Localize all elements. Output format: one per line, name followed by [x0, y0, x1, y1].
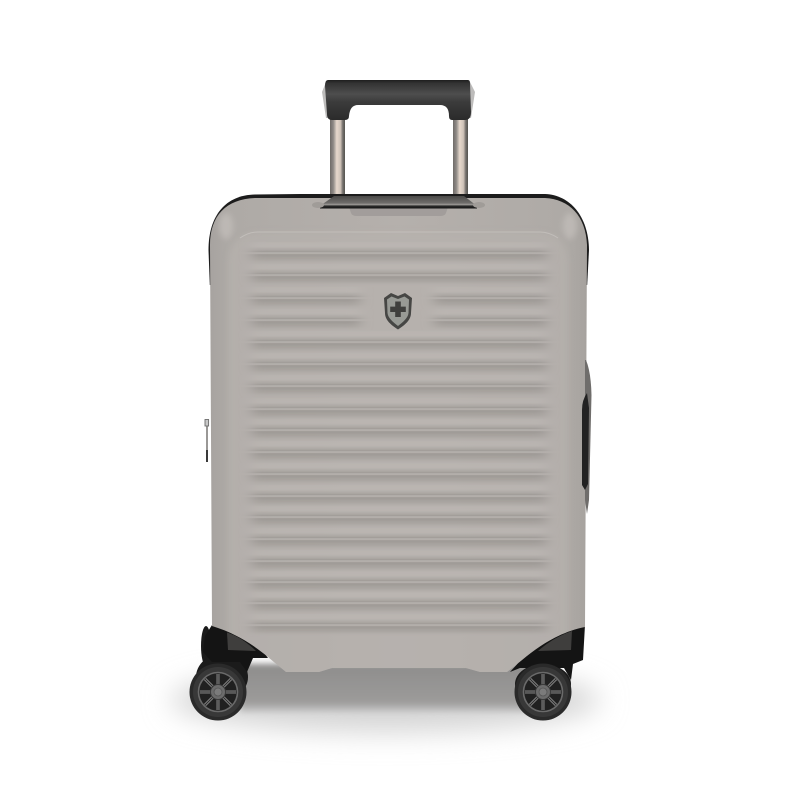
panel top highlight — [240, 232, 558, 238]
horizontal ridges — [252, 242, 546, 636]
shield face — [387, 296, 409, 326]
rear black shell rim — [208, 194, 589, 285]
suitcase illustration — [168, 80, 602, 744]
left wheel housing — [203, 625, 268, 672]
right handle mount — [473, 202, 485, 208]
right front wheel — [514, 664, 572, 720]
handle recess — [349, 207, 448, 216]
main shell — [210, 198, 587, 672]
soft ground shadow — [170, 668, 600, 732]
middle left tyre — [196, 654, 248, 700]
top carry handle — [312, 196, 485, 216]
corner highlights — [219, 213, 577, 239]
right wedge gloss on wheel housing — [538, 631, 572, 651]
handle grip — [325, 80, 471, 120]
right pole — [453, 118, 468, 198]
recessed front panel — [228, 632, 568, 664]
handle bar — [320, 196, 477, 208]
shield outline — [384, 293, 412, 330]
brand shield logo — [384, 293, 412, 330]
handle side caps — [322, 82, 475, 118]
left handle mount — [312, 202, 324, 208]
right rear tyre — [515, 664, 571, 704]
shield cross — [390, 302, 406, 317]
contact shadow under case — [240, 664, 530, 712]
left pole — [330, 118, 345, 198]
telescopic handle — [322, 80, 475, 198]
right wheel housing — [510, 625, 585, 680]
left front wheel — [190, 664, 246, 720]
left wedge gloss on wheel housing — [227, 632, 256, 651]
rear left tyre — [201, 626, 211, 666]
side carry handle — [582, 360, 592, 514]
side zipper pull — [205, 420, 209, 462]
